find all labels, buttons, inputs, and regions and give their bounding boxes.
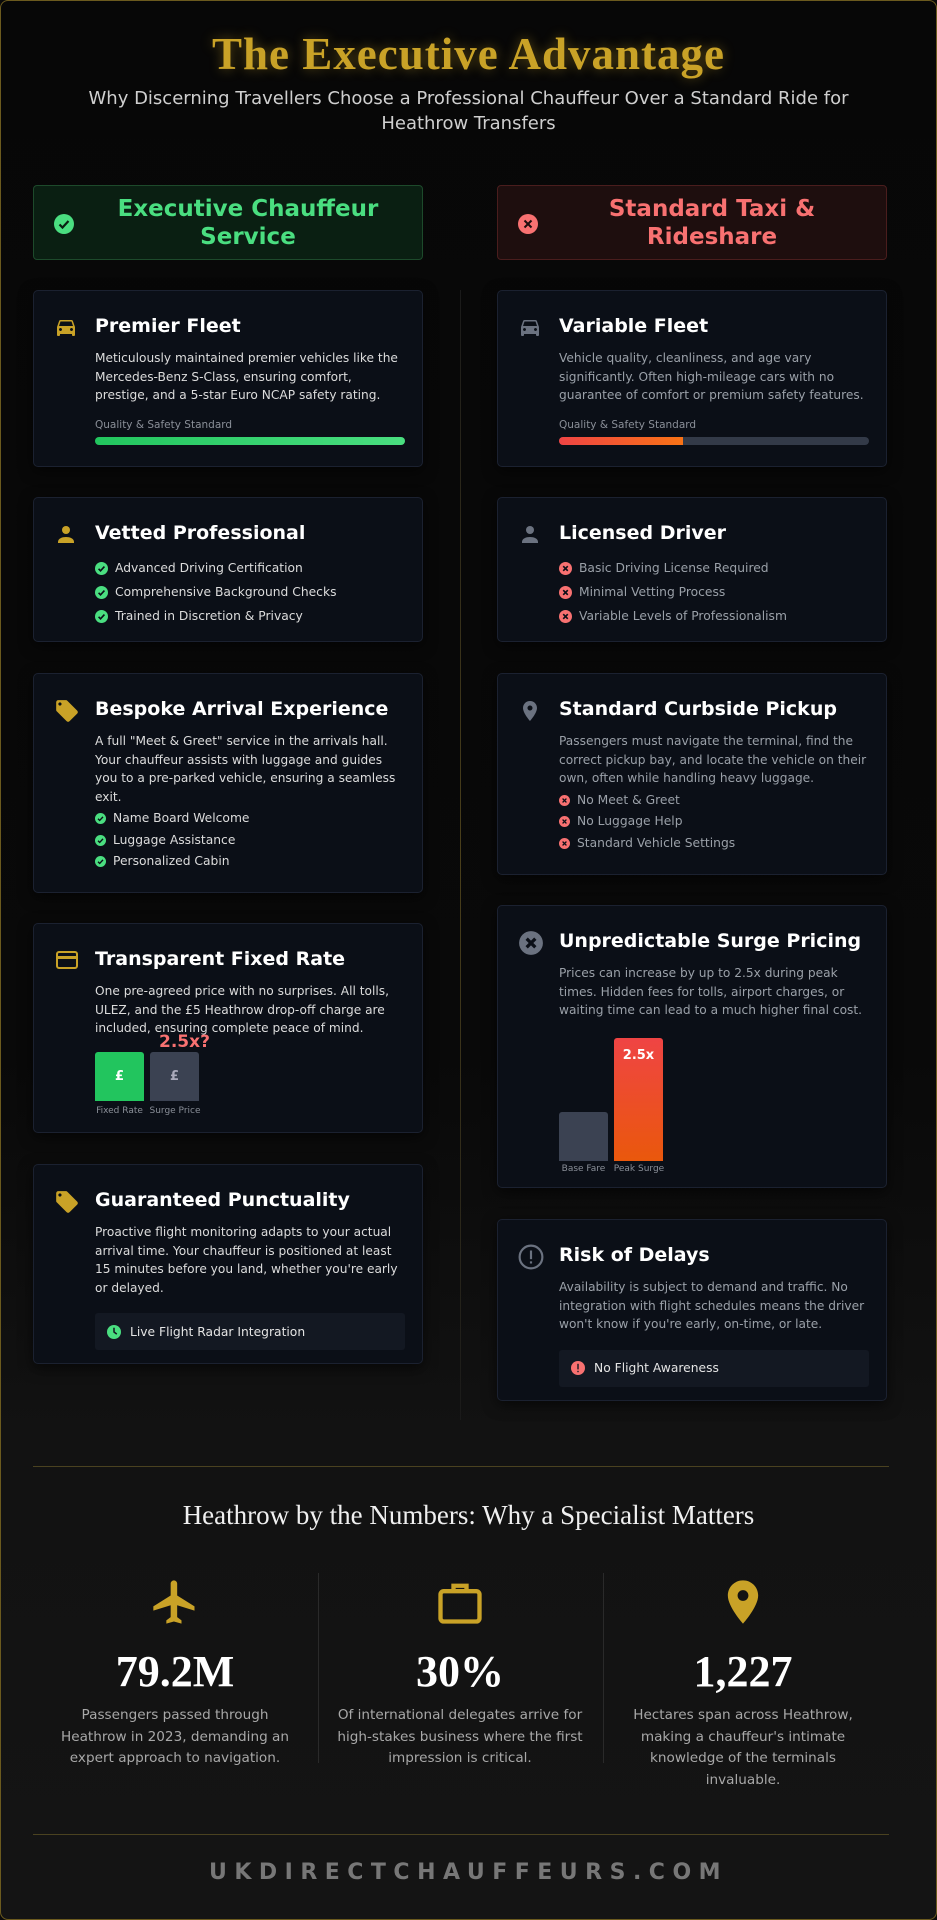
icon: car gold xyxy=(57,320,75,336)
section title: Heathrow by the Numbers: Why a Specialist Matters xyxy=(183,1500,754,1530)
subtitle: Why Discerning Travellers Choose a Professional Chauffeur Over a Standard Ride for Heathrow Transfers xyxy=(88,88,849,134)
card: bespoke arrival: Personalized Cabin xyxy=(113,854,230,868)
divider xyxy=(33,1834,889,1835)
card: vetted professional: Comprehensive Background Checks xyxy=(115,585,336,599)
card: bespoke arrival: Your chauffeur assists with luggage and guides xyxy=(95,752,382,766)
header: executive chauffeur service xyxy=(33,185,423,260)
card: bespoke arrival xyxy=(33,673,423,893)
card: surge pricing: Unpredictable Surge Pricing xyxy=(559,930,861,952)
pill: live flight radar xyxy=(95,1313,405,1350)
card: transparent fixed rate: ULEZ, and the £5 Heathrow drop-off charge are xyxy=(95,1002,385,1016)
card: transparent fixed rate: 2.5x? xyxy=(159,1032,210,1052)
icon: exclamation circle grey xyxy=(518,1244,544,1270)
card: vetted professional: Trained in Discretion & Privacy xyxy=(115,609,303,623)
card: premier fleet: prestige, and a 5-star Euro NCAP safety rating. xyxy=(95,388,380,402)
card: premier fleet: Quality & Safety Standard xyxy=(95,418,232,430)
card: bespoke arrival: A full "Meet & Greet" service in the arrivals hall. xyxy=(95,734,388,748)
title: The Executive Advantage xyxy=(212,29,725,79)
stat: hectares xyxy=(633,1580,853,1788)
stat: delegates xyxy=(337,1584,583,1766)
chart: fixed vs surge: Surge Price xyxy=(149,1106,201,1116)
stat: delegates: Of international delegates arrive for high-stakes business where the first impression is critical. xyxy=(337,1707,583,1766)
card: licensed driver: Minimal Vetting Process xyxy=(579,585,725,599)
card: bespoke arrival: Name Board Welcome xyxy=(113,811,249,825)
bar: quality full xyxy=(95,436,405,444)
header: standard taxi xyxy=(497,185,887,260)
card: transparent fixed rate: Transparent Fixed Rate xyxy=(95,948,345,970)
card: surge pricing: times. Hidden fees for tolls, airport charges, or xyxy=(559,984,844,998)
card: bespoke arrival: Luggage Assistance xyxy=(113,832,235,846)
pill: no flight awareness: No Flight Awareness xyxy=(594,1361,719,1375)
chart: fixed vs surge: Fixed Rate xyxy=(96,1106,143,1116)
card: guaranteed punctuality: or delayed. xyxy=(95,1280,164,1294)
card: premier fleet: Meticulously maintained premier vehicles like the xyxy=(95,351,398,365)
card: variable fleet: Vehicle quality, cleanliness, and age vary xyxy=(559,351,811,365)
card: guaranteed punctuality: arrival time. Your chauffeur is positioned at least xyxy=(95,1244,392,1258)
card: licensed driver: Variable Levels of Professionalism xyxy=(579,609,787,623)
card: curbside pickup: No Meet & Greet xyxy=(577,792,680,806)
card: transparent fixed rate xyxy=(33,923,423,1133)
icon: credit card gold xyxy=(56,951,78,969)
card: curbside pickup: Standard Vehicle Settings xyxy=(577,836,735,850)
icon: car grey xyxy=(521,320,539,336)
card: licensed driver: Licensed Driver xyxy=(559,522,726,544)
header: standard taxi: Rideshare xyxy=(647,224,777,250)
icon: tag gold xyxy=(56,1191,78,1213)
icon: check circle xyxy=(54,214,74,234)
stat: passengers: 79.2M xyxy=(116,1647,234,1696)
card: risk of delays: won't know if you're early, on-time, or late. xyxy=(559,1317,822,1331)
card: vetted professional: Advanced Driving Certification xyxy=(115,561,303,575)
icon: tag gold xyxy=(56,700,78,722)
header: executive chauffeur service: Executive Chauffeur xyxy=(118,196,378,222)
card: curbside pickup: own, often while handling heavy luggage. xyxy=(559,771,814,785)
card: bespoke arrival: you to a pre-parked vehicle, ensuring a seamless xyxy=(95,771,395,785)
chart: fixed vs surge: £ xyxy=(170,1068,179,1084)
card: premier fleet xyxy=(33,290,423,467)
card: guaranteed punctuality: Guaranteed Punctuality xyxy=(95,1189,350,1211)
icon: plane xyxy=(153,1580,194,1624)
icon: location pin xyxy=(728,1580,758,1624)
card: variable fleet: Variable Fleet xyxy=(559,315,708,337)
card: transparent fixed rate: One pre-agreed price with no surprises. All tolls, xyxy=(95,984,389,998)
chart: base fare vs peak surge: Peak Surge xyxy=(614,1164,664,1174)
pill: no flight awareness xyxy=(559,1350,869,1386)
card: risk of delays: Risk of Delays xyxy=(559,1244,710,1266)
card: premier fleet: Premier Fleet xyxy=(95,315,241,337)
stat: delegates: 30% xyxy=(416,1647,504,1696)
chart: base fare vs peak surge xyxy=(559,1038,664,1174)
card: variable fleet: guarantee of comfort or premium safety features. xyxy=(559,388,864,402)
card: curbside pickup: Standard Curbside Pickup xyxy=(559,698,837,720)
center divider xyxy=(460,290,461,1420)
card: vetted professional: Vetted Professional xyxy=(95,522,305,544)
chart: base fare vs peak surge: 2.5x xyxy=(623,1048,654,1062)
stat: hectares: 1,227 xyxy=(694,1647,792,1696)
icon: person grey xyxy=(522,526,538,543)
card: guaranteed punctuality: 15 minutes before you land, whether you're early xyxy=(95,1262,398,1276)
bar: quality partial xyxy=(559,436,869,444)
card: licensed driver xyxy=(497,497,887,642)
icon: x circle grey xyxy=(519,931,543,955)
card: bespoke arrival: Bespoke Arrival Experience xyxy=(95,698,388,720)
icon: briefcase xyxy=(438,1584,482,1624)
stat: hectares: Hectares span across Heathrow, making a chauffeur's intimate knowledge of the terminals invaluable. xyxy=(633,1707,853,1788)
chart: fixed vs surge xyxy=(95,1032,210,1116)
card: risk of delays: integration with flight schedules means the driver xyxy=(559,1298,864,1312)
icon: pin grey xyxy=(523,701,537,721)
card: guaranteed punctuality: Proactive flight monitoring adapts to your actual xyxy=(95,1225,391,1239)
header: standard taxi: Standard Taxi & xyxy=(609,196,815,222)
card: risk of delays: Availability is subject to demand and traffic. No xyxy=(559,1280,848,1294)
card: variable fleet: significantly. Often high-mileage cars with no xyxy=(559,370,834,384)
card: curbside pickup xyxy=(497,673,887,875)
card: bespoke arrival: exit. xyxy=(95,790,122,804)
header: executive chauffeur service: Service xyxy=(200,224,296,250)
card: curbside pickup: No Luggage Help xyxy=(577,814,683,828)
card: surge pricing: Prices can increase by up to 2.5x during peak xyxy=(559,966,838,980)
footer: UKDIRECTCHAUFFEURS.COM xyxy=(209,1860,728,1885)
icon: x circle xyxy=(518,214,538,234)
stat: passengers xyxy=(61,1580,289,1766)
card: curbside pickup: Passengers must navigate the terminal, find the xyxy=(559,734,853,748)
card: guaranteed punctuality xyxy=(33,1164,423,1364)
card: transparent fixed rate: included, ensuring complete peace of mind. xyxy=(95,1021,363,1035)
card: variable fleet: Quality & Safety Standard xyxy=(559,418,696,430)
icon: person gold xyxy=(58,526,74,543)
divider xyxy=(33,1466,889,1467)
card: vetted professional xyxy=(33,497,423,642)
card: variable fleet xyxy=(497,290,887,467)
pill: live flight radar: Live Flight Radar Integration xyxy=(130,1324,305,1338)
card: risk of delays xyxy=(497,1219,887,1401)
stat separators xyxy=(318,1573,319,1763)
card: licensed driver: Basic Driving License Required xyxy=(579,561,769,575)
card: surge pricing: waiting time can lead to a much higher final cost. xyxy=(559,1003,862,1017)
card: surge pricing xyxy=(497,905,887,1188)
card: premier fleet: Mercedes-Benz S-Class, ensuring comfort, xyxy=(95,370,352,384)
stat: passengers: Passengers passed through Heathrow in 2023, demanding an expert approach to navigation. xyxy=(61,1707,289,1766)
chart: fixed vs surge: £ xyxy=(115,1068,124,1084)
card: curbside pickup: correct pickup bay, and locate the vehicle on their xyxy=(559,752,866,766)
chart: base fare vs peak surge: Base Fare xyxy=(562,1164,605,1174)
